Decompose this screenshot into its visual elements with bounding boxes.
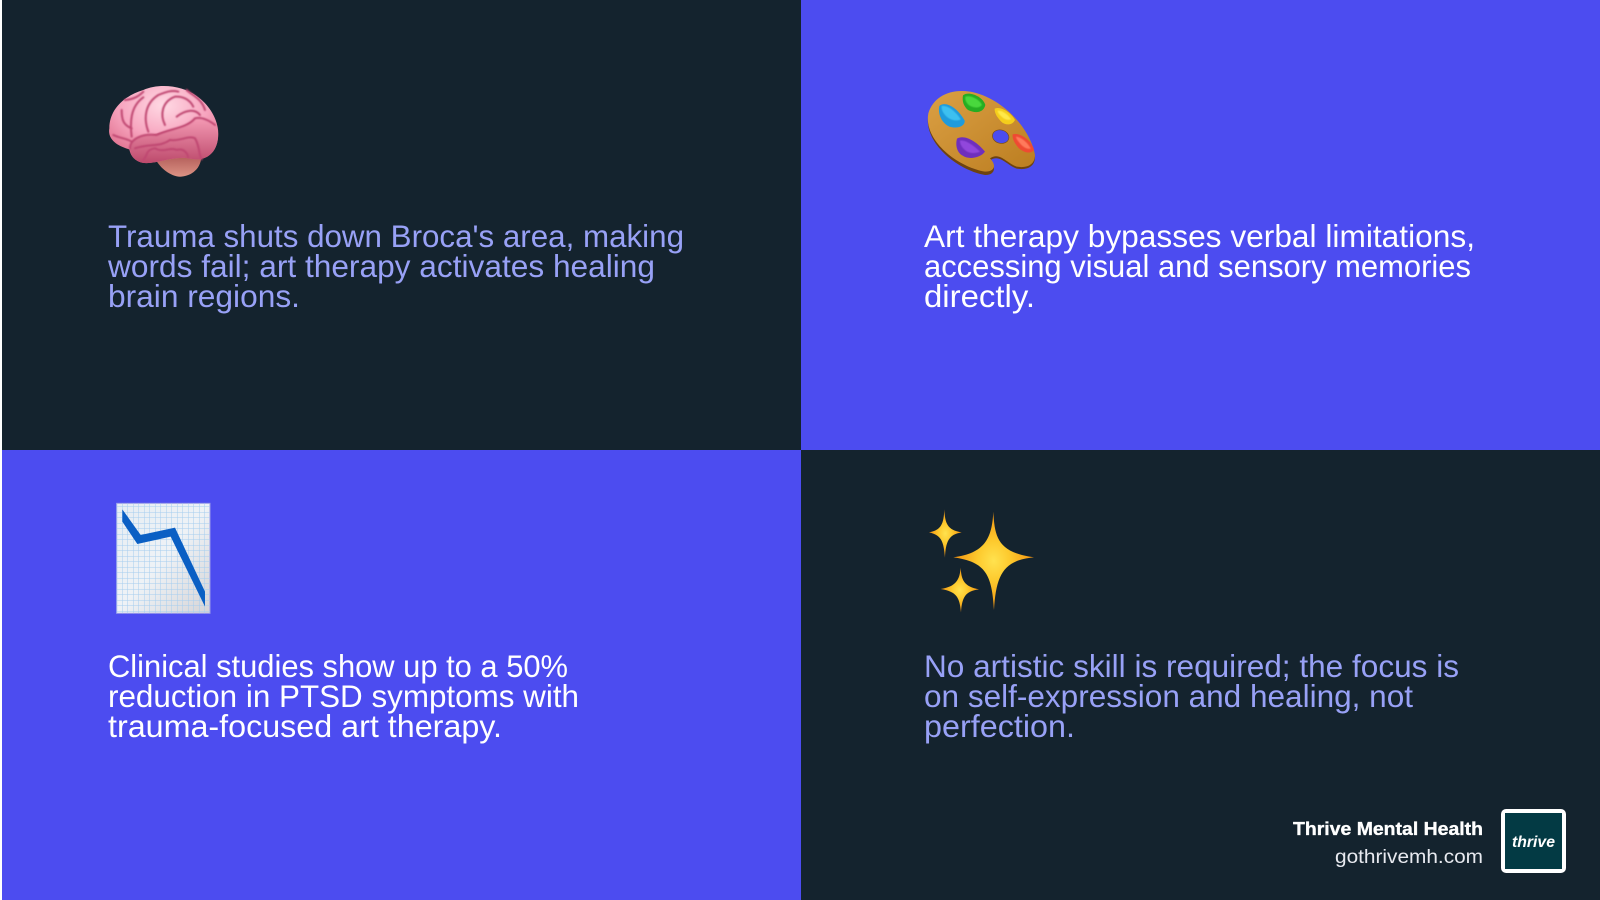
text: brain and trauma: Trauma shuts down Broca's area, making — [108, 218, 684, 254]
text: no artistic skill required: perfection. — [924, 708, 1075, 744]
text: brain and trauma — [107, 218, 684, 314]
icon: sparkles — [929, 509, 1034, 612]
logo — [1501, 809, 1566, 873]
brand name: Thrive Mental Health — [1293, 819, 1483, 839]
text: art therapy bypasses verbal limits: directly. — [924, 278, 1035, 314]
text: art therapy bypasses verbal limits — [924, 218, 1475, 314]
brand block — [1293, 809, 1566, 873]
panel: art therapy bypasses verbal limits — [801, 0, 1600, 450]
text: brain and trauma: words fail; art therapy activates healing — [107, 248, 655, 284]
text: clinical studies: trauma-focused art therapy. — [108, 708, 502, 744]
text: clinical studies — [108, 648, 579, 744]
text: no artistic skill required — [924, 648, 1459, 744]
icon: chart decreasing — [117, 503, 210, 613]
text: no artistic skill required: No artistic skill is required; the focus is — [924, 648, 1459, 684]
logo: thrive — [1512, 834, 1555, 851]
text: art therapy bypasses verbal limits: Art therapy bypasses verbal limitations, — [924, 218, 1475, 254]
text: no artistic skill required: on self-expression and healing, not — [924, 678, 1413, 714]
panel: no artistic skill required — [801, 450, 1600, 900]
text: clinical studies: reduction in PTSD symptoms with — [108, 678, 579, 714]
icon: artist palette — [928, 91, 1035, 175]
text: art therapy bypasses verbal limits: accessing visual and sensory memories — [924, 248, 1471, 284]
text: clinical studies: Clinical studies show up to a 50% — [108, 648, 568, 684]
text: brain and trauma: brain regions. — [108, 278, 300, 314]
icon: brain — [109, 86, 218, 177]
panel: clinical studies — [2, 450, 801, 900]
panel: brain and trauma — [2, 0, 801, 450]
brand website: gothrivemh.com — [1335, 847, 1483, 868]
